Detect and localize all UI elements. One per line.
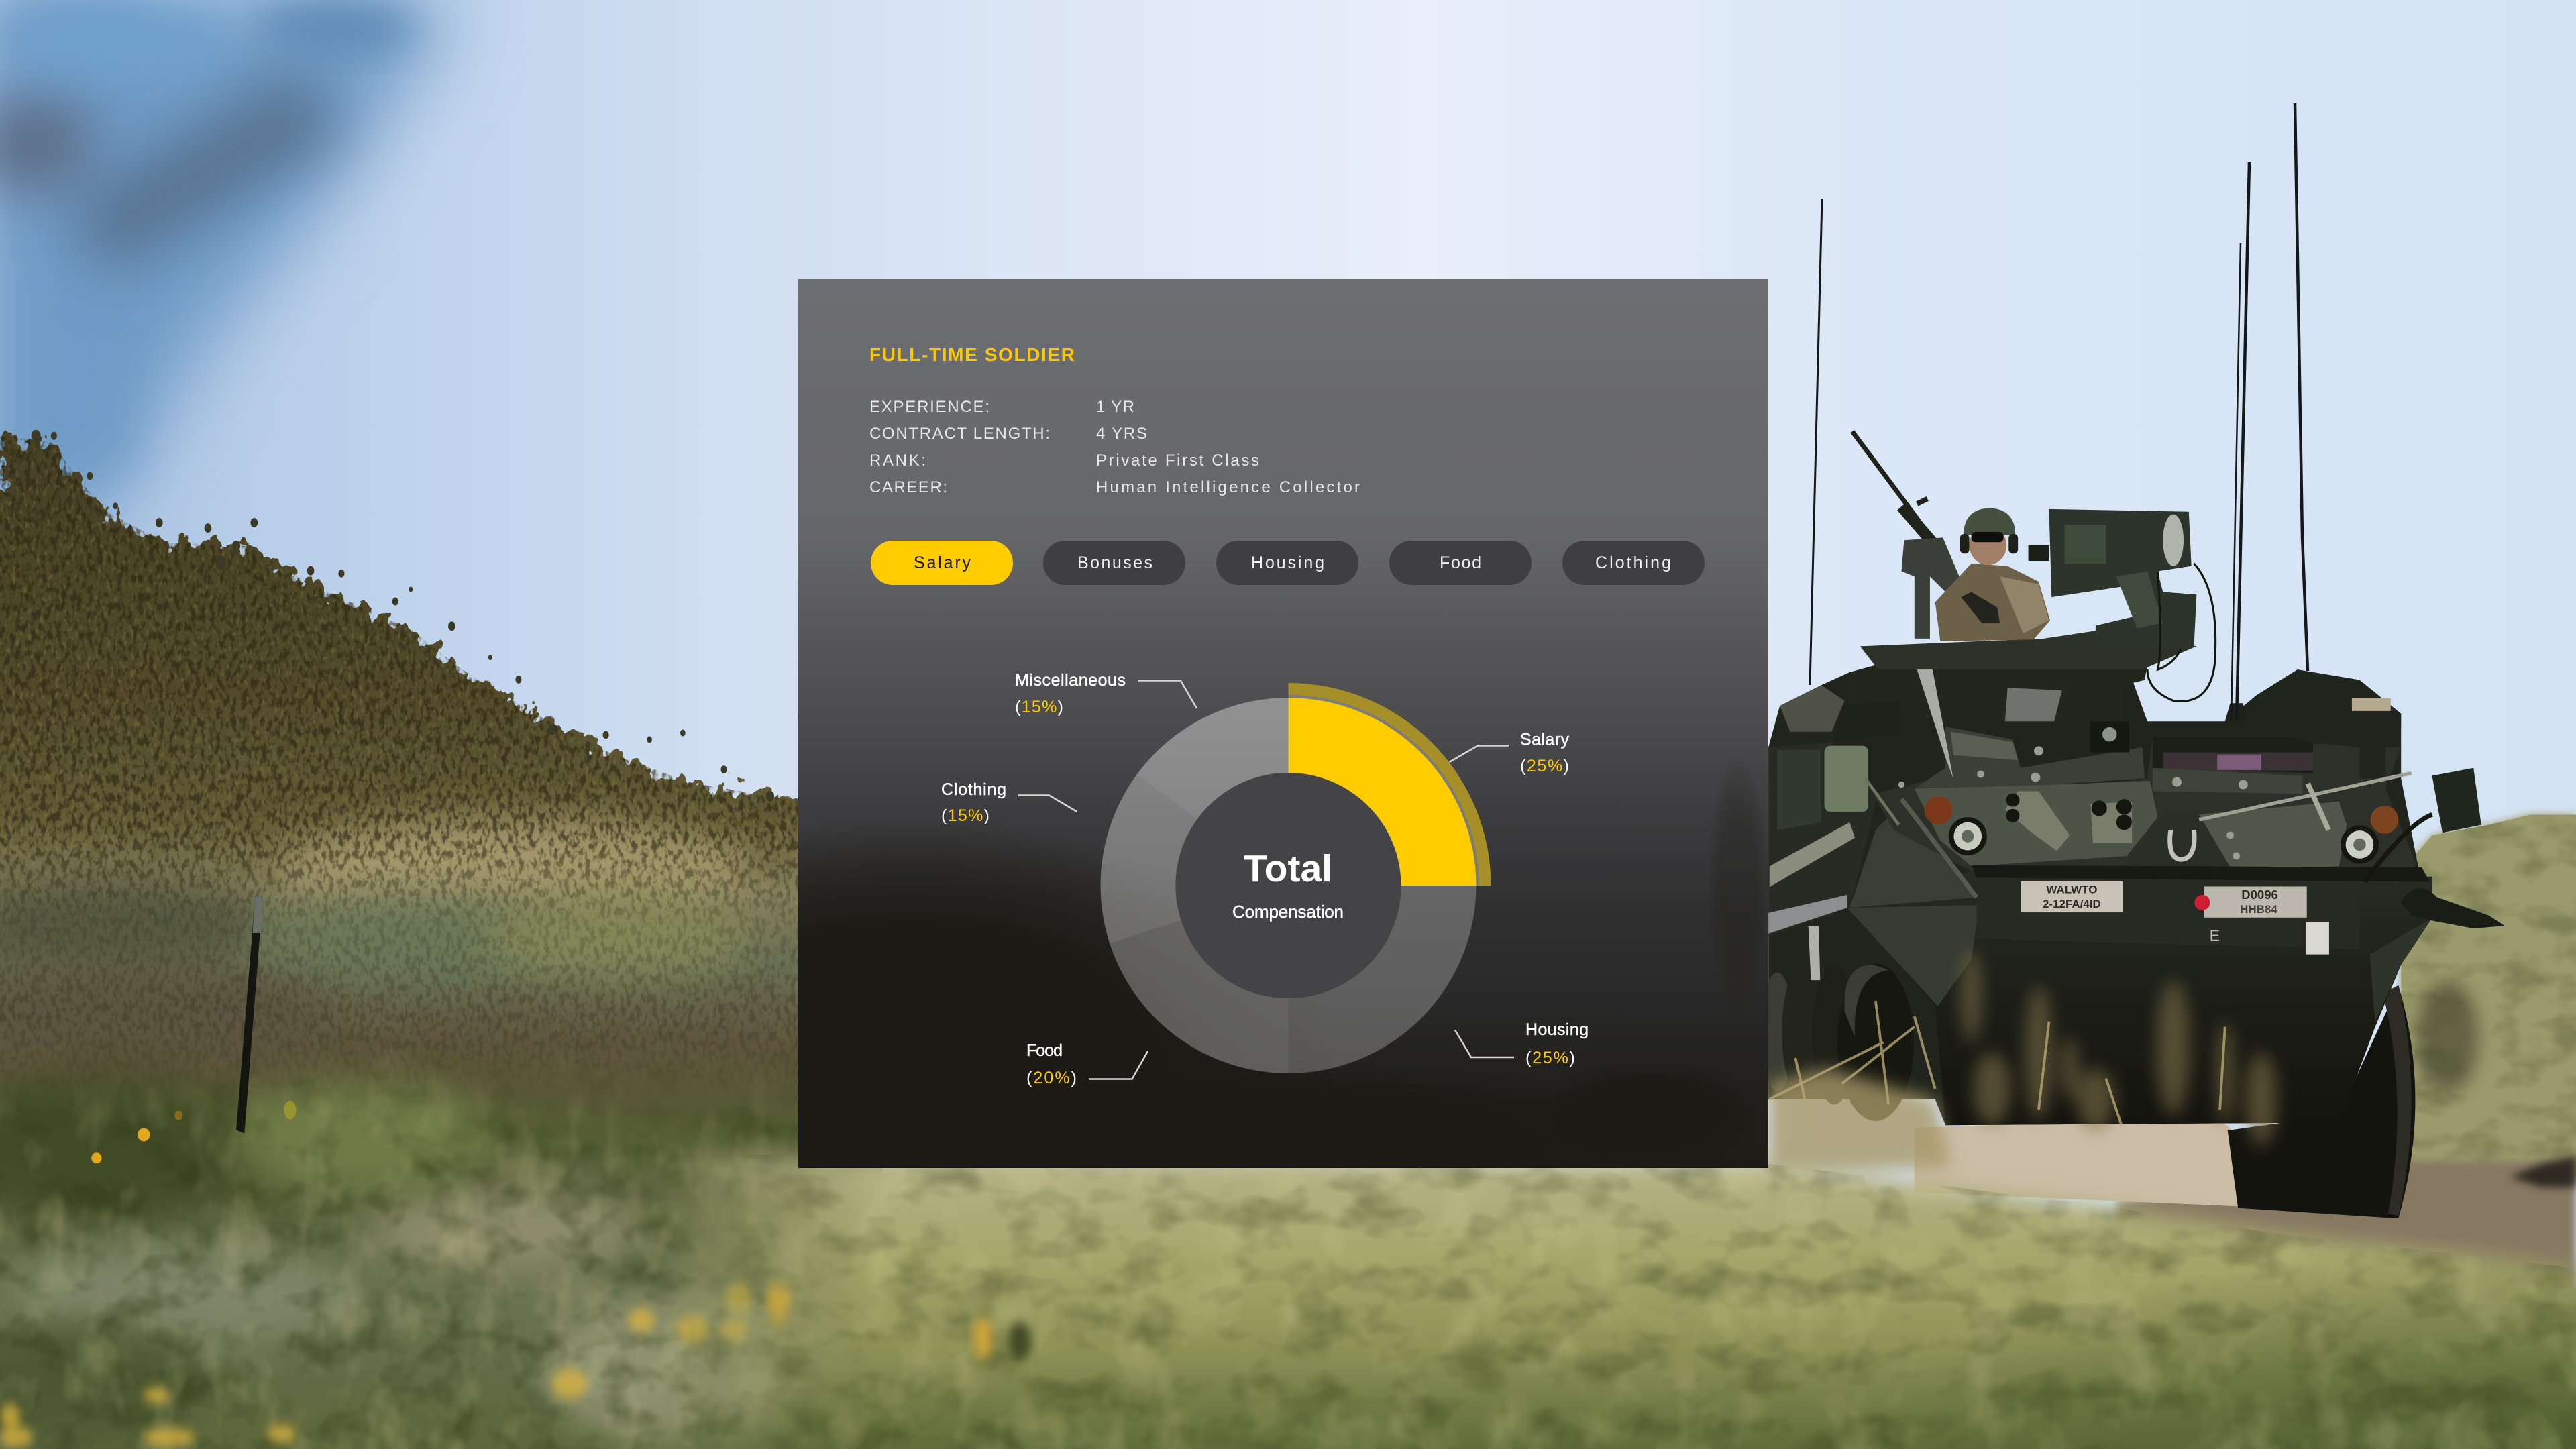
tow bracket xyxy=(2401,888,2505,928)
number plates xyxy=(2021,881,2329,955)
tab buttons: Salary xyxy=(914,553,971,572)
donut centre label: Total xyxy=(1244,847,1332,890)
cables xyxy=(2147,564,2216,701)
tab buttons: Housing xyxy=(1251,553,1324,572)
soldier details: 1 YR xyxy=(1096,398,1134,416)
background photo: grassy hillside on the left xyxy=(0,402,883,1449)
blurred flowers in the foreground xyxy=(0,1279,794,1448)
bright ground under the hull xyxy=(1915,1118,2239,1206)
stray leaves on the hill edge xyxy=(32,430,774,802)
donut centre label: Compensation xyxy=(1232,902,1344,922)
small yellow flowers xyxy=(91,1101,297,1163)
title: FULL-TIME SOLDIER xyxy=(869,344,1075,365)
tab buttons: Food xyxy=(1440,553,1481,572)
tab buttons: Bonuses xyxy=(1077,553,1152,572)
soldier details: RANK: xyxy=(869,451,926,470)
donut centre label xyxy=(1232,847,1344,922)
chart labels: Housing xyxy=(1525,1020,1589,1039)
soldier details: 4 YRS xyxy=(1096,425,1147,443)
soldier details: Human Intelligence Collector xyxy=(1096,478,1360,496)
chart labels: (25%) xyxy=(1520,757,1569,775)
chart labels: Food xyxy=(1026,1041,1063,1060)
chart labels: Clothing xyxy=(941,780,1006,799)
antenna mount and equipment at rear right xyxy=(2256,669,2401,778)
lower hull xyxy=(1847,871,2432,1125)
soldier xyxy=(1935,564,2050,641)
chart labels: (15%) xyxy=(1015,698,1063,716)
chart labels: (20%) xyxy=(1026,1069,1077,1087)
machine gun xyxy=(1852,431,1935,543)
right hillside behind the vehicle xyxy=(2401,814,2576,1177)
number plates: WALWTO xyxy=(2046,883,2097,896)
deck shadow xyxy=(1972,865,2430,882)
dirt road xyxy=(2116,1161,2576,1348)
soldier details: CONTRACT LENGTH: xyxy=(869,425,1050,443)
upper deck xyxy=(1873,737,2427,879)
tow fittings and shackle xyxy=(2005,791,2233,871)
background photo: armoured vehicle on the right xyxy=(1761,431,2576,1348)
chart labels: (15%) xyxy=(941,806,989,825)
vehicle silhouette xyxy=(1768,664,2432,1125)
headlights and markers xyxy=(1924,796,2398,864)
soldier details xyxy=(869,398,1360,496)
side box xyxy=(2432,768,2481,833)
soldier details: Private First Class xyxy=(1096,451,1259,470)
number plates: 2-12FA/4ID xyxy=(2043,898,2101,910)
chart labels: Miscellaneous xyxy=(1015,671,1126,690)
soldier details: CAREER: xyxy=(869,478,947,496)
rods across the deck xyxy=(2199,773,2412,820)
number plates: D0096 xyxy=(2241,888,2278,902)
turret ring xyxy=(1849,664,2147,721)
front wheel xyxy=(2228,985,2415,1218)
bolts on the deck xyxy=(1898,746,2248,859)
tab buttons xyxy=(871,541,1705,585)
donut chart: total compensation xyxy=(1101,683,1491,1073)
chart labels xyxy=(941,671,1589,1087)
chart labels: (25%) xyxy=(1525,1049,1575,1067)
radio antennas xyxy=(1810,103,2308,721)
blurred grass stalks in front of the vehicle xyxy=(1961,949,2277,1146)
left wheels xyxy=(1761,963,1914,1121)
leader lines xyxy=(1018,680,1514,1079)
chart labels: Salary xyxy=(1520,730,1570,749)
left side body xyxy=(1768,742,1878,936)
fence post xyxy=(236,896,263,1133)
number plates: E xyxy=(2210,927,2220,945)
soldier details: EXPERIENCE: xyxy=(869,398,989,416)
panel: full-time soldier compensation card xyxy=(798,279,1768,1168)
tab buttons: Clothing xyxy=(1595,553,1671,572)
mirror xyxy=(1825,746,1868,812)
number plates: HHB84 xyxy=(2240,903,2277,916)
sensor mount xyxy=(2049,509,2196,646)
background photo: blurred foreground grass xyxy=(470,1140,2576,1449)
